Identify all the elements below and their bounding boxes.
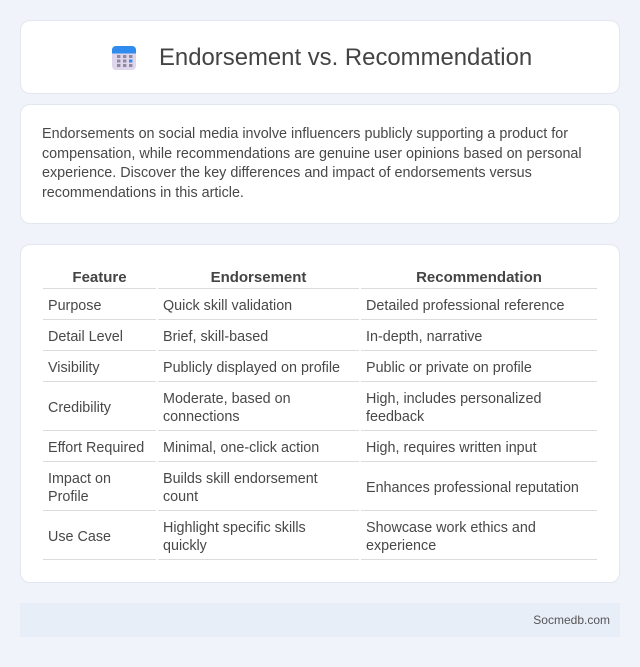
intro text: Endorsements on social media involve influencers publicly supporting a product for xyxy=(42,126,568,142)
comparison table: Highlight specific skills xyxy=(163,520,306,536)
comparison table: count xyxy=(163,489,198,505)
comparison table: feedback xyxy=(366,409,424,425)
comparison table: Use Case xyxy=(48,529,111,545)
intro text: recommendations in this article. xyxy=(42,184,244,200)
comparison table: Purpose xyxy=(48,298,101,314)
comparison table: Showcase work ethics and xyxy=(366,520,536,536)
comparison table: Detail Level xyxy=(48,329,123,345)
footer source text: Socmedb.com xyxy=(533,613,610,627)
panel: intro xyxy=(20,104,620,224)
title: Endorsement vs. Recommendation xyxy=(159,44,532,71)
comparison table: Impact on xyxy=(48,471,111,487)
comparison table: Builds skill endorsement xyxy=(163,471,318,487)
intro text xyxy=(42,126,582,200)
panel: table card xyxy=(20,244,620,583)
comparison table: Endorsement xyxy=(211,269,306,286)
footer bar xyxy=(20,603,620,637)
intro text: experience. Discover the key differences and impact of endorsements versus xyxy=(42,165,532,181)
comparison table: High, includes personalized xyxy=(366,391,541,407)
comparison table: Enhances professional reputation xyxy=(366,480,579,496)
panel: title card xyxy=(20,20,620,94)
comparison table: Quick skill validation xyxy=(163,298,292,314)
comparison table: High, requires written input xyxy=(366,440,537,456)
comparison table: connections xyxy=(163,409,240,425)
comparison table: Recommendation xyxy=(416,269,542,286)
comparison table: In-depth, narrative xyxy=(366,329,482,345)
comparison table: Minimal, one-click action xyxy=(163,440,319,456)
comparison table: Visibility xyxy=(48,360,100,376)
comparison table: quickly xyxy=(163,538,207,554)
comparison table: Profile xyxy=(48,489,89,505)
intro text: compensation, while recommendations are genuine user opinions based on personal xyxy=(42,146,582,162)
comparison table xyxy=(43,269,597,560)
comparison table: Public or private on profile xyxy=(366,360,532,376)
comparison table: Effort Required xyxy=(48,440,144,456)
icon: calendar xyxy=(112,46,136,70)
comparison table: Brief, skill-based xyxy=(163,329,268,345)
comparison table: Publicly displayed on profile xyxy=(163,360,340,376)
comparison table: Feature xyxy=(72,269,127,286)
comparison table: Moderate, based on xyxy=(163,391,291,407)
comparison table: Detailed professional reference xyxy=(366,298,565,314)
comparison table: experience xyxy=(366,538,436,554)
comparison table: Credibility xyxy=(48,400,111,416)
